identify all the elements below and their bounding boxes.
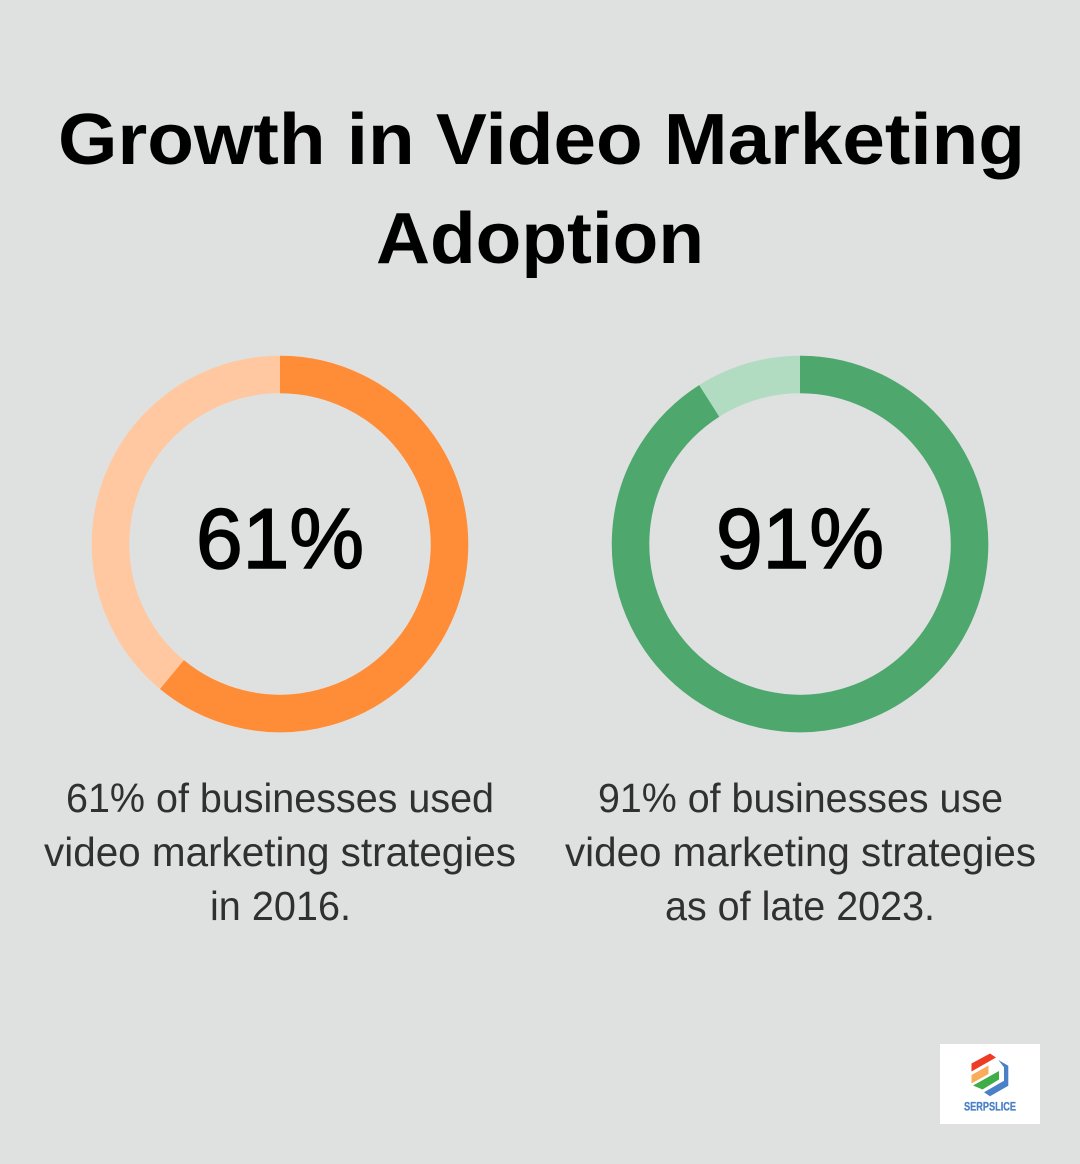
title bbox=[58, 100, 1025, 279]
logo: SerpSlice bbox=[940, 1044, 1040, 1124]
description: 2016 bbox=[44, 775, 516, 929]
description: 2023: video marketing strategies bbox=[565, 829, 1036, 875]
donut chart: 91% bbox=[630, 374, 970, 714]
value: 91%: 91% bbox=[716, 492, 884, 587]
description: 2016: video marketing strategies bbox=[44, 829, 516, 875]
title: Growth in Video Marketing bbox=[58, 100, 1025, 180]
description: 2023: as of late 2023. bbox=[665, 883, 935, 929]
logo: SerpSlice: SERPSLICE bbox=[964, 1100, 1016, 1114]
donut chart: 61% bbox=[110, 374, 450, 714]
description: 2023 bbox=[565, 775, 1036, 929]
description: 2016: in 2016. bbox=[210, 883, 351, 929]
description: 2023: 91% of businesses use bbox=[598, 775, 1003, 821]
title: Adoption bbox=[376, 199, 704, 279]
panel: 2023 statistic bbox=[565, 374, 1036, 929]
panel: 2016 statistic bbox=[44, 374, 516, 929]
value: 61%: 61% bbox=[196, 492, 364, 587]
description: 2016: 61% of businesses used bbox=[66, 775, 494, 821]
